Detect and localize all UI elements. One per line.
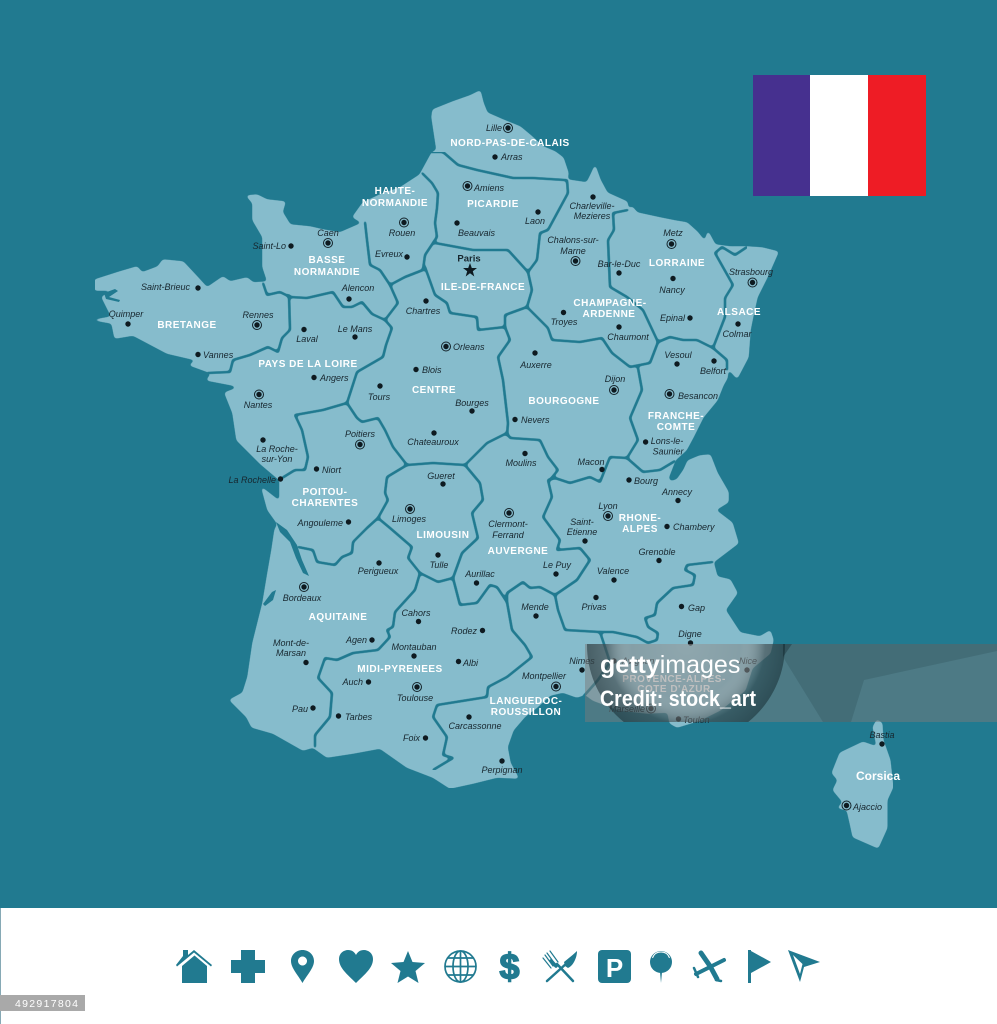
city: Lons-le-Saunier: Lons-le-	[651, 436, 683, 446]
watermark band	[585, 644, 997, 722]
city: Poitiers: Poitiers	[345, 429, 376, 439]
watermark text: gettyimages: images	[660, 651, 740, 679]
region name labels: COTE D'AZUR	[637, 684, 711, 695]
city: Carcassonne	[448, 714, 502, 731]
city: Rodez: Rodez	[451, 626, 478, 636]
city: La Roche-sur-Yon: sur-Yon	[262, 454, 292, 464]
city: Metz	[663, 228, 683, 248]
icon: home	[176, 950, 212, 983]
city: Rouen: Rouen	[389, 228, 415, 238]
city: Albi: Albi	[462, 658, 479, 668]
city: Saint-Lo: Saint-Lo	[252, 241, 286, 251]
icon: flag	[748, 950, 771, 983]
region name labels: ILE-DE-FRANCE	[441, 282, 525, 293]
city: Bastia: Bastia	[869, 730, 895, 740]
city: Nantes: Nantes	[244, 400, 273, 410]
city: Charleville-Mezieres: Charleville-	[569, 201, 615, 211]
city: Strasbourg: Strasbourg	[729, 267, 773, 277]
city: Avignon: Avignon	[621, 656, 654, 666]
city: Charleville-Mezieres: Mezieres	[574, 211, 611, 221]
city: Besancon	[665, 390, 718, 401]
Gironde estuary	[276, 522, 309, 576]
city: Saint-Etienne	[567, 517, 597, 544]
city: Quimper	[109, 309, 144, 327]
city: Aurillac: Aurillac	[464, 569, 495, 579]
flag of France	[753, 75, 926, 196]
city: Saint-Etienne: Saint-	[570, 517, 594, 527]
city: Dijon: Dijon	[605, 374, 625, 384]
city: Nice: Nice	[739, 656, 757, 666]
region name labels: PROVENCE-ALPES-	[622, 674, 726, 685]
city: Niort	[314, 465, 342, 475]
region name labels: AQUITAINE	[309, 612, 367, 623]
city: Grenoble	[638, 547, 676, 563]
city: Agen: Agen	[345, 635, 367, 645]
city: Nimes: Nimes	[569, 656, 595, 666]
region name labels: LIMOUSIN	[417, 530, 469, 541]
region name labels: CENTRE	[412, 385, 456, 396]
map of Corsica	[832, 720, 900, 848]
city: Bar-le-Duc: Bar-le-Duc	[598, 259, 641, 269]
city: Vesoul: Vesoul	[664, 350, 693, 360]
city: Foix	[403, 733, 428, 743]
city: Strasbourg	[729, 267, 773, 287]
city: Charleville-Mezieres	[569, 194, 615, 221]
city: Carcassonne: Carcassonne	[448, 721, 502, 731]
city: Tours: Tours	[368, 392, 391, 402]
city: Metz: Metz	[663, 228, 683, 238]
city: Mont-de-Marsan	[273, 638, 309, 665]
city: Chateauroux	[407, 430, 459, 447]
region name labels: BRETANGE	[157, 320, 217, 331]
city: Mende: Mende	[521, 602, 549, 612]
region name labels	[157, 138, 761, 718]
region name labels: AUVERGNE	[488, 546, 548, 557]
city: Limoges: Limoges	[392, 514, 427, 524]
city: Nevers: Nevers	[521, 415, 550, 425]
region name labels: BOURGOGNE	[528, 396, 600, 407]
city: Perigueux	[358, 560, 399, 576]
city: Pau	[292, 704, 316, 714]
city: Cahors	[401, 608, 431, 624]
watermark text: credit: Credit: stock_art	[600, 686, 757, 711]
city: Bar-le-Duc	[598, 259, 641, 276]
city: Moulins: Moulins	[505, 458, 537, 468]
city: Lons-le-Saunier	[643, 436, 685, 456]
region name labels: NORMANDIE	[294, 267, 360, 278]
icon: dollar sign: $	[499, 946, 520, 987]
city: Foix: Foix	[403, 733, 420, 743]
city: Belfort: Belfort	[700, 366, 727, 376]
city: Toulon: Toulon	[683, 715, 710, 725]
city: Angouleme: Angouleme	[296, 518, 343, 528]
city: Le Puy	[543, 560, 572, 577]
city: Toulouse	[397, 682, 433, 703]
city: La Rochelle: La Rochelle	[228, 475, 276, 485]
region name labels: ARDENNE	[583, 309, 635, 320]
region name labels: PAYS DE LA LOIRE	[258, 359, 358, 370]
city: Vesoul	[664, 350, 693, 367]
region name labels: NORD-PAS-DE-CALAIS	[450, 138, 570, 149]
icon: crossed fork and knife	[543, 951, 577, 981]
city: Nancy	[659, 276, 685, 295]
region name labels: ROUSSILLON	[491, 707, 561, 718]
icon: airplane	[694, 953, 724, 981]
icon: medical cross	[231, 950, 265, 983]
city: Auch: Auch	[341, 677, 363, 687]
city: Privas: Privas	[581, 602, 607, 612]
region borders	[207, 152, 747, 770]
city: Cahors: Cahors	[401, 608, 431, 618]
city: Mont-de-Marsan: Marsan	[276, 648, 306, 658]
city: Clermont-Ferrand	[488, 508, 528, 540]
city: Bourges: Bourges	[455, 398, 489, 408]
city: Bourges	[455, 398, 489, 414]
image id tag: 492917804	[15, 998, 78, 1010]
city: Epinal: Epinal	[660, 313, 686, 323]
land outline	[95, 91, 778, 788]
city: Grenoble: Grenoble	[638, 547, 676, 557]
city: Tulle: Tulle	[430, 560, 448, 570]
city: Bastia	[869, 730, 895, 747]
city: Alencon: Alencon	[341, 283, 374, 293]
city: Troyes: Troyes	[551, 317, 578, 327]
Brest roadstead	[104, 289, 120, 302]
city: Laval: Laval	[296, 334, 319, 344]
city: Paris with star: Paris	[457, 254, 481, 264]
city: Rennes	[242, 310, 274, 330]
city: Auxerre: Auxerre	[519, 360, 552, 370]
bottom white icon band	[0, 908, 997, 1024]
city: Auxerre	[519, 350, 552, 370]
city: Tours	[368, 383, 391, 402]
city: Tarbes: Tarbes	[345, 712, 373, 722]
city: Albi	[456, 658, 479, 668]
city: Gueret: Gueret	[427, 471, 455, 481]
city: Moulins	[505, 451, 537, 468]
city: Orleans: Orleans	[453, 342, 485, 352]
city: Lyon: Lyon	[598, 501, 618, 511]
city: La Roche-sur-Yon	[256, 437, 298, 464]
city: Beauvais: Beauvais	[458, 228, 496, 238]
city: Digne: Digne	[678, 629, 702, 639]
city: Gueret	[427, 471, 455, 487]
city: Marseille: Marseille	[609, 704, 645, 714]
city: Le Puy: Le Puy	[543, 560, 572, 570]
region name labels: LANGUEDOC-	[490, 696, 562, 707]
city: La Roche-sur-Yon: La Roche-	[256, 444, 298, 454]
city: Tulle	[430, 552, 448, 570]
region name labels: HAUTE-	[375, 186, 415, 197]
city: Chalons-sur-Marne: Marne	[560, 246, 586, 256]
city: Besancon: Besancon	[678, 391, 718, 401]
city: Beauvais	[454, 220, 496, 238]
city: Perigueux: Perigueux	[358, 566, 399, 576]
city: Privas	[581, 595, 607, 612]
city: Ajaccio	[842, 801, 882, 812]
city: Lyon	[598, 501, 618, 520]
city: Paris with star	[457, 254, 481, 276]
region name labels: CHARENTES	[292, 498, 358, 509]
city: Chalons-sur-Marne	[547, 235, 599, 266]
city: Toulouse: Toulouse	[397, 693, 433, 703]
city: Angers: Angers	[319, 373, 349, 383]
city: Arras: Arras	[500, 152, 523, 162]
city: Limoges	[392, 504, 427, 524]
icon: star	[391, 951, 425, 983]
region name labels: ALSACE	[717, 307, 761, 318]
city: Nimes	[569, 656, 595, 673]
city: Dijon	[605, 374, 625, 394]
city: Chaumont: Chaumont	[607, 332, 649, 342]
city: Perpignan: Perpignan	[481, 765, 523, 775]
city: Chalons-sur-Marne: Chalons-sur-	[547, 235, 599, 245]
city: Montauban	[391, 642, 437, 659]
city: Chateauroux: Chateauroux	[407, 437, 459, 447]
image id tag	[0, 995, 85, 1011]
region name labels: PICARDIE	[467, 199, 519, 210]
region name labels: ALPES	[622, 524, 658, 535]
icon: map tack	[650, 951, 672, 983]
icon: globe	[445, 951, 476, 982]
city: Belfort	[700, 358, 727, 376]
city: Colmar	[722, 321, 752, 339]
city: Lons-le-Saunier: Saunier	[652, 446, 685, 456]
city: Blois: Blois	[422, 365, 442, 375]
region name labels: MIDI-PYRENEES	[357, 664, 443, 675]
city: Nantes	[244, 390, 273, 410]
city: Evreux: Evreux	[375, 249, 403, 259]
city: Laon: Laon	[525, 216, 545, 226]
region name labels: RHONE-	[619, 513, 661, 524]
icon: location pin	[291, 950, 314, 983]
watermark text: gettyimages: getty	[600, 651, 660, 679]
city: Rennes: Rennes	[242, 310, 274, 320]
city: Alencon	[341, 283, 374, 302]
city: Bordeaux	[283, 582, 322, 603]
city: Amiens: Amiens	[473, 183, 505, 193]
city: Quimper: Quimper	[109, 309, 144, 319]
city: Rouen	[389, 218, 415, 238]
icon: navigation arrow	[788, 950, 820, 982]
city: Annecy: Annecy	[661, 487, 693, 497]
city: Lille	[486, 123, 512, 133]
region name labels: LORRAINE	[649, 258, 705, 269]
city: Chartres: Chartres	[406, 306, 441, 316]
label: Corsica: Corsica	[856, 769, 900, 783]
city: Blois	[413, 365, 442, 375]
city: Chartres	[406, 298, 441, 316]
city: Gap: Gap	[688, 603, 705, 613]
city: Troyes	[551, 310, 578, 327]
city: Pau: Pau	[292, 704, 308, 714]
city: Valence: Valence	[597, 566, 629, 576]
city: Vannes: Vannes	[203, 350, 234, 360]
icon: parking	[598, 950, 631, 983]
city: Nancy: Nancy	[659, 285, 685, 295]
city: Colmar: Colmar	[722, 329, 752, 339]
city: Mende	[521, 602, 549, 619]
city: Laval	[296, 327, 319, 344]
city: Clermont-Ferrand: Clermont-	[488, 519, 528, 529]
city: Macon: Macon	[577, 457, 605, 467]
region name labels: NORMANDIE	[362, 198, 428, 209]
region name labels: COMTE	[657, 422, 695, 433]
icon: parking: P	[606, 953, 623, 983]
city markers and names	[109, 123, 895, 812]
city: Macon	[577, 457, 605, 472]
city: Valence	[597, 566, 629, 583]
city: Montpellier	[522, 671, 567, 691]
region name labels: CHAMPAGNE-	[573, 298, 647, 309]
region name labels: BASSE	[309, 255, 345, 266]
city: Le Mans	[338, 324, 373, 340]
city: Bordeaux: Bordeaux	[283, 593, 322, 603]
city: Nice	[739, 656, 757, 673]
city: Laon	[525, 209, 545, 226]
city: Niort: Niort	[322, 465, 342, 475]
city: Amiens	[463, 182, 505, 193]
city: Le Mans: Le Mans	[338, 324, 373, 334]
city: Montauban: Montauban	[391, 642, 437, 652]
Arcachon basin	[263, 590, 276, 606]
city: Saint-Etienne: Etienne	[567, 527, 597, 537]
region name labels: POITOU-	[303, 487, 347, 498]
icon: heart	[339, 950, 373, 983]
city: Chaumont	[607, 324, 649, 342]
city: Caen: Caen	[317, 228, 339, 238]
city: Gap	[679, 603, 705, 613]
city: Poitiers	[345, 429, 376, 449]
city: Annecy	[661, 487, 693, 503]
city: Clermont-Ferrand: Ferrand	[492, 530, 525, 540]
city: Lille: Lille	[486, 123, 502, 133]
map of mainland France	[95, 91, 778, 788]
city: Montpellier: Montpellier	[522, 671, 567, 681]
city: Caen	[317, 228, 339, 248]
city: Saint-Brieuc: Saint-Brieuc	[141, 282, 190, 292]
city: Mont-de-Marsan: Mont-de-	[273, 638, 309, 648]
city: Auch	[341, 677, 371, 687]
city: Bourg: Bourg	[634, 476, 658, 486]
city: Aurillac	[464, 569, 495, 586]
region name labels: FRANCHE-	[648, 411, 704, 422]
city: Perpignan	[481, 758, 523, 775]
city: Ajaccio: Ajaccio	[852, 802, 882, 812]
city: Chambery: Chambery	[673, 522, 715, 532]
city: Digne	[678, 629, 702, 646]
